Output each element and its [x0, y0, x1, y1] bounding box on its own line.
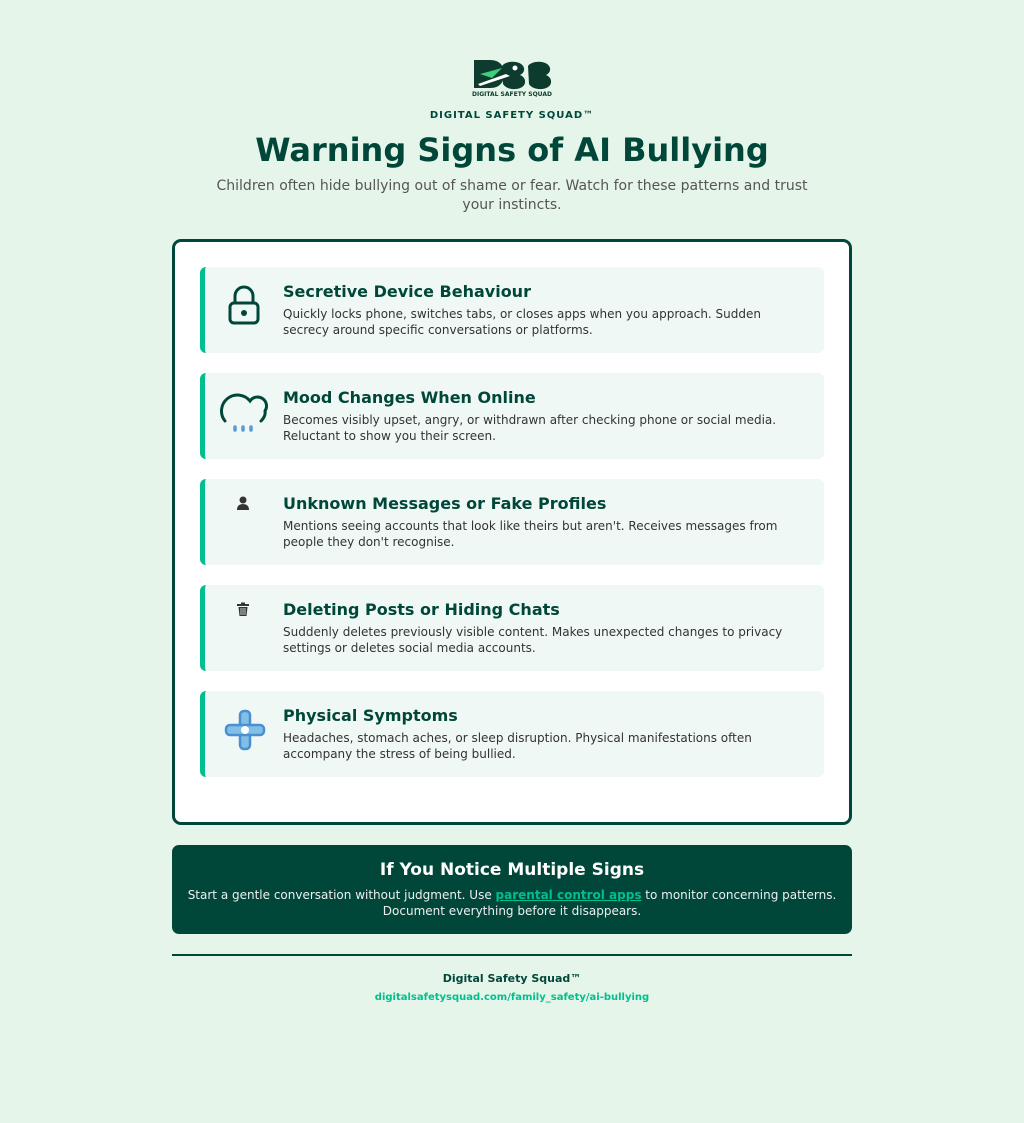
item: mood changes: Mood Changes When Online [283, 388, 536, 407]
panel: warning signs [172, 239, 852, 825]
icon: bandage [224, 710, 266, 750]
icon: lock [228, 286, 260, 324]
item: unknown messages: Unknown Messages or Fake Profiles [283, 494, 606, 513]
item: physical symptoms [200, 691, 824, 777]
item: secretive device [200, 267, 824, 353]
logo: DIGITAL SAFETY SQUAD [472, 91, 552, 98]
footer: Digital Safety Squad™ [443, 972, 581, 985]
brand name: DIGITAL SAFETY SQUAD™ [430, 110, 594, 121]
item: mood changes [200, 373, 824, 459]
logo [472, 60, 552, 98]
item: unknown messages [200, 479, 824, 565]
item: deleting posts [200, 585, 824, 671]
icon: rain cloud [220, 394, 268, 432]
item: secretive device: Quickly locks phone, switches tabs, or closes apps when you approach. Sudden secrecy around specific conversations or platforms. [283, 307, 761, 337]
item: mood changes: Becomes visibly upset, angry, or withdrawn after checking phone or social media. Reluctant to show you their screen. [283, 413, 776, 443]
icon: trash [237, 602, 249, 616]
item: deleting posts: Deleting Posts or Hiding Chats [283, 600, 560, 619]
item: unknown messages: Mentions seeing accounts that look like theirs but aren't. Receives messages from people they don't recognise. [283, 519, 777, 549]
item: physical symptoms: Headaches, stomach aches, or sleep disruption. Physical manifestations often accompany the stress of being bullied. [283, 731, 752, 761]
item: secretive device: Secretive Device Behaviour [283, 282, 531, 301]
callout: if you notice multiple signs: If You Notice Multiple Signs [380, 860, 644, 880]
title: Warning Signs of AI Bullying [255, 131, 769, 169]
footer: digitalsafetysquad.com/family_safety/ai-bullying [375, 992, 649, 1003]
icon: person [237, 496, 249, 510]
subtitle: Children often hide bullying out of shame or fear. Watch for these patterns and trust your instincts. [216, 178, 808, 213]
footer [375, 972, 649, 1003]
item: physical symptoms: Physical Symptoms [283, 706, 458, 725]
callout: if you notice multiple signs: Start a gentle conversation without judgment. Use parental control apps to monitor concerning patterns. [188, 888, 836, 902]
item: deleting posts: Suddenly deletes previously visible content. Makes unexpected changes to privacy settings or deletes social media accounts. [283, 625, 782, 655]
callout: if you notice multiple signs: Document everything before it disappears. [383, 904, 641, 918]
callout: if you notice multiple signs [172, 845, 852, 934]
